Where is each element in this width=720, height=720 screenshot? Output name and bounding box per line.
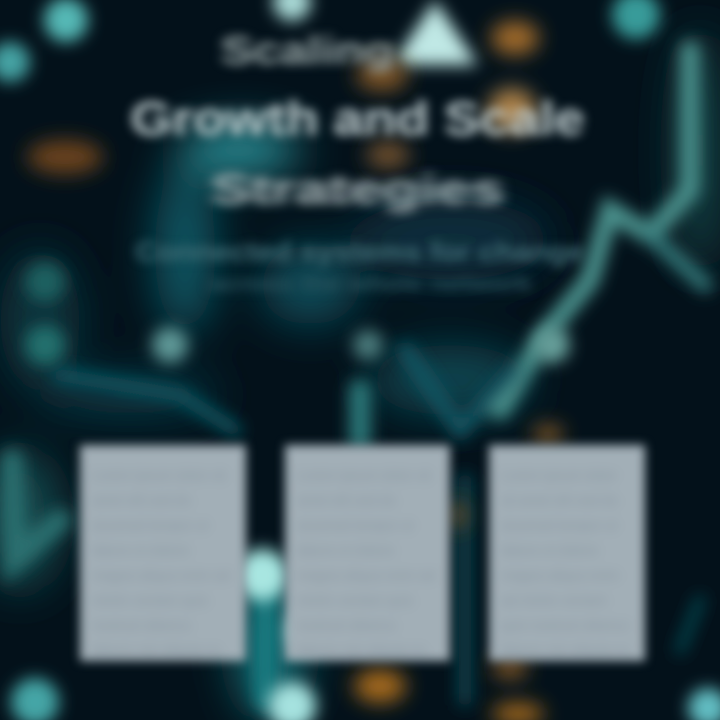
title line 3: Strategies <box>211 165 504 214</box>
subtitle line 1: Connected systems for change <box>136 236 584 267</box>
panel: card 2 <box>285 445 450 661</box>
title line 2: Growth and Scale <box>130 93 585 146</box>
orange accents <box>27 21 563 720</box>
panel: card 1 <box>80 445 246 661</box>
panel: card 3 <box>489 445 645 661</box>
subtitle line 2: across the whole network <box>209 271 531 296</box>
title <box>124 29 590 220</box>
subtitle <box>132 236 586 296</box>
title line 1: Scaling <box>221 29 394 73</box>
